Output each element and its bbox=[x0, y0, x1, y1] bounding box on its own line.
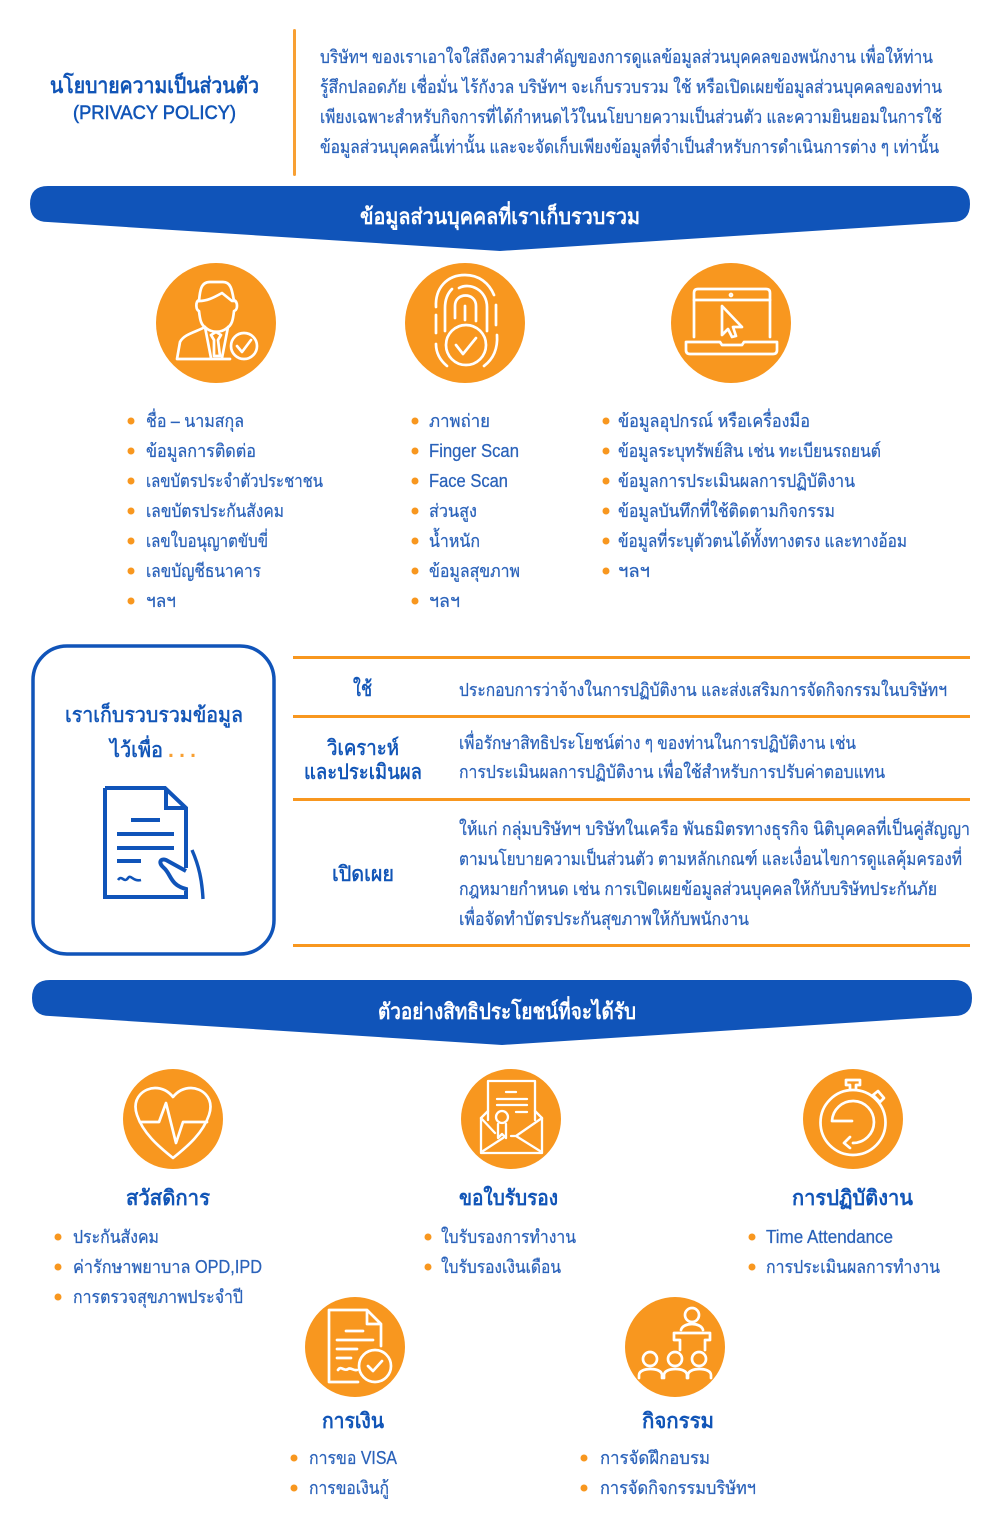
heading: we collect data for: เราเก็บรวบรวมข้อมูล bbox=[65, 701, 243, 728]
benefit: activities bbox=[580, 1297, 756, 1498]
panel: purpose of collection bbox=[33, 646, 274, 954]
row: analyse and evaluate: และประเมินผล bbox=[304, 761, 422, 784]
heading: work performance: การปฏิบัติงาน bbox=[792, 1187, 914, 1210]
row: analyse and evaluate: การประเมินผลการปฏิบัติงาน เพื่อใช้สำหรับการปรับค่าตอบแทน bbox=[459, 759, 885, 782]
list: device and activity data: ข้อมูลการประเมินผลการปฏิบัติงาน bbox=[618, 471, 855, 492]
icon: fingerprint with check bbox=[405, 263, 525, 383]
row: disclose: เปิดเผย bbox=[332, 863, 394, 886]
heading: we collect data for bbox=[65, 701, 243, 762]
list: personal information: เลขบัตรประกันสังคม bbox=[146, 501, 284, 521]
list: certificate items: ใบรับรองเงินเดือน bbox=[441, 1256, 561, 1277]
title: privacy policy bbox=[50, 71, 259, 124]
row: disclose: เพื่อจัดทำบัตรประกันสุขภาพให้กับพนักงาน bbox=[459, 906, 749, 930]
icon: employee with check bbox=[156, 263, 276, 383]
list: welfare items: ประกันสังคม bbox=[73, 1227, 159, 1247]
icon: stopwatch bbox=[803, 1069, 903, 1169]
list: personal information: เลขบัตรประจำตัวประชาชน bbox=[146, 471, 323, 491]
list: finance items: การขอเงินกู้ bbox=[309, 1478, 389, 1499]
heading: welfare: สวัสดิการ bbox=[126, 1187, 211, 1210]
list: work items: Time Attendance bbox=[766, 1227, 893, 1247]
list: personal information: เลขบัญชีธนาคาร bbox=[146, 561, 261, 581]
title: privacy policy: นโยบายความเป็นส่วนตัว bbox=[50, 71, 259, 98]
row: disclose bbox=[332, 816, 970, 930]
list: biometric and physical data: ภาพถ่าย bbox=[429, 411, 490, 431]
row: disclose: กฎหมายกำหนด เช่น การเปิดเผยข้อมูลส่วนบุคคลให้กับบริษัทประกันภัย bbox=[459, 878, 937, 900]
list: finance items: การขอ VISA bbox=[309, 1448, 397, 1468]
list: certificate items: ใบรับรองการทำงาน bbox=[441, 1226, 576, 1247]
list: device and activity data: ฯลฯ bbox=[618, 561, 650, 581]
icon: certificate envelope bbox=[461, 1069, 561, 1169]
list: biometric and physical data: ข้อมูลสุขภาพ bbox=[429, 561, 520, 582]
icon: document in hand bbox=[105, 788, 203, 899]
icon: document with check bbox=[305, 1297, 405, 1397]
list: biometric and physical data: น้ำหนัก bbox=[429, 528, 480, 551]
list: biometric and physical data: ฯลฯ bbox=[429, 591, 460, 611]
row: analyse and evaluate bbox=[304, 730, 885, 784]
benefit: finance bbox=[290, 1297, 405, 1499]
list: certificate items bbox=[424, 1226, 576, 1277]
row: use: ใช้ bbox=[353, 677, 372, 701]
banner: benefits: ตัวอย่างสิทธิประโยชน์ที่จะได้รับ bbox=[378, 995, 636, 1024]
list: device and activity data: ข้อมูลระบุทรัพย์สิน เช่น ทะเบียนรถยนต์ bbox=[618, 441, 881, 462]
list: activity items: การจัดกิจกรรมบริษัทฯ bbox=[600, 1478, 756, 1498]
icon: heart pulse bbox=[123, 1069, 223, 1169]
list: biometric and physical data: Finger Scan bbox=[429, 441, 519, 461]
list: personal information: ชื่อ – นามสกุล bbox=[146, 408, 244, 432]
heading: we collect data for: ... bbox=[168, 739, 196, 762]
heading: activities: กิจกรรม bbox=[642, 1410, 714, 1433]
row: use bbox=[353, 677, 947, 701]
list: device and activity data: ข้อมูลที่ระบุตัวตนได้ทั้งทางตรง และทางอ้อม bbox=[618, 528, 907, 552]
banner: personal data collected: ข้อมูลส่วนบุคคลที่เราเก็บรวบรวม bbox=[360, 200, 640, 231]
heading: certificate request: ขอใบรับรอง bbox=[459, 1185, 558, 1210]
benefit: certificates bbox=[424, 1069, 576, 1277]
title: privacy policy: (PRIVACY POLICY) bbox=[73, 103, 236, 124]
list: biometric and physical data: Face Scan bbox=[429, 471, 508, 491]
icon: presenter and audience bbox=[625, 1297, 725, 1397]
list: welfare items bbox=[54, 1227, 262, 1308]
row: analyse and evaluate: วิเคราะห์ bbox=[327, 736, 399, 760]
list: welfare items: การตรวจสุขภาพประจำปี bbox=[73, 1287, 243, 1308]
list: welfare items: ค่ารักษาพยาบาล OPD,IPD bbox=[73, 1257, 262, 1277]
list: biometric and physical data bbox=[412, 411, 520, 611]
heading: finance: การเงิน bbox=[322, 1410, 385, 1433]
list: activity items bbox=[580, 1448, 756, 1498]
benefit: work performance bbox=[748, 1069, 940, 1277]
list: work items bbox=[748, 1227, 940, 1277]
list: activity items: การจัดฝึกอบรม bbox=[600, 1448, 710, 1468]
list: personal information: เลขใบอนุญาตขับขี่ bbox=[146, 528, 268, 552]
banner: benefits bbox=[32, 980, 972, 1045]
list: device and activity data bbox=[602, 408, 907, 581]
table rules bbox=[293, 658, 970, 946]
banner: personal data collected bbox=[30, 186, 970, 251]
list: personal information: ข้อมูลการติดต่อ bbox=[146, 441, 256, 462]
list: biometric and physical data: ส่วนสูง bbox=[429, 501, 477, 522]
list: device and activity data: ข้อมูลบันทึกที่ใช้ติดตามกิจกรรม bbox=[618, 498, 835, 522]
text block: privacy intro bbox=[320, 44, 942, 158]
heading: we collect data for: ไว้เพื่อ bbox=[108, 735, 163, 762]
icon: laptop with cursor bbox=[671, 263, 791, 383]
divider: header vertical orange line bbox=[293, 29, 296, 176]
benefit: welfare bbox=[54, 1069, 262, 1308]
list: work items: การประเมินผลการทำงาน bbox=[766, 1257, 940, 1277]
list: device and activity data: ข้อมูลอุปกรณ์ หรือเครื่องมือ bbox=[618, 408, 810, 432]
row: analyse and evaluate: เพื่อรักษาสิทธิประโยชน์ต่าง ๆ ของท่านในการปฏิบัติงาน เช่น bbox=[459, 730, 856, 753]
list: finance items bbox=[290, 1448, 397, 1499]
list: personal information bbox=[128, 408, 323, 611]
list: personal information: ฯลฯ bbox=[146, 591, 176, 611]
